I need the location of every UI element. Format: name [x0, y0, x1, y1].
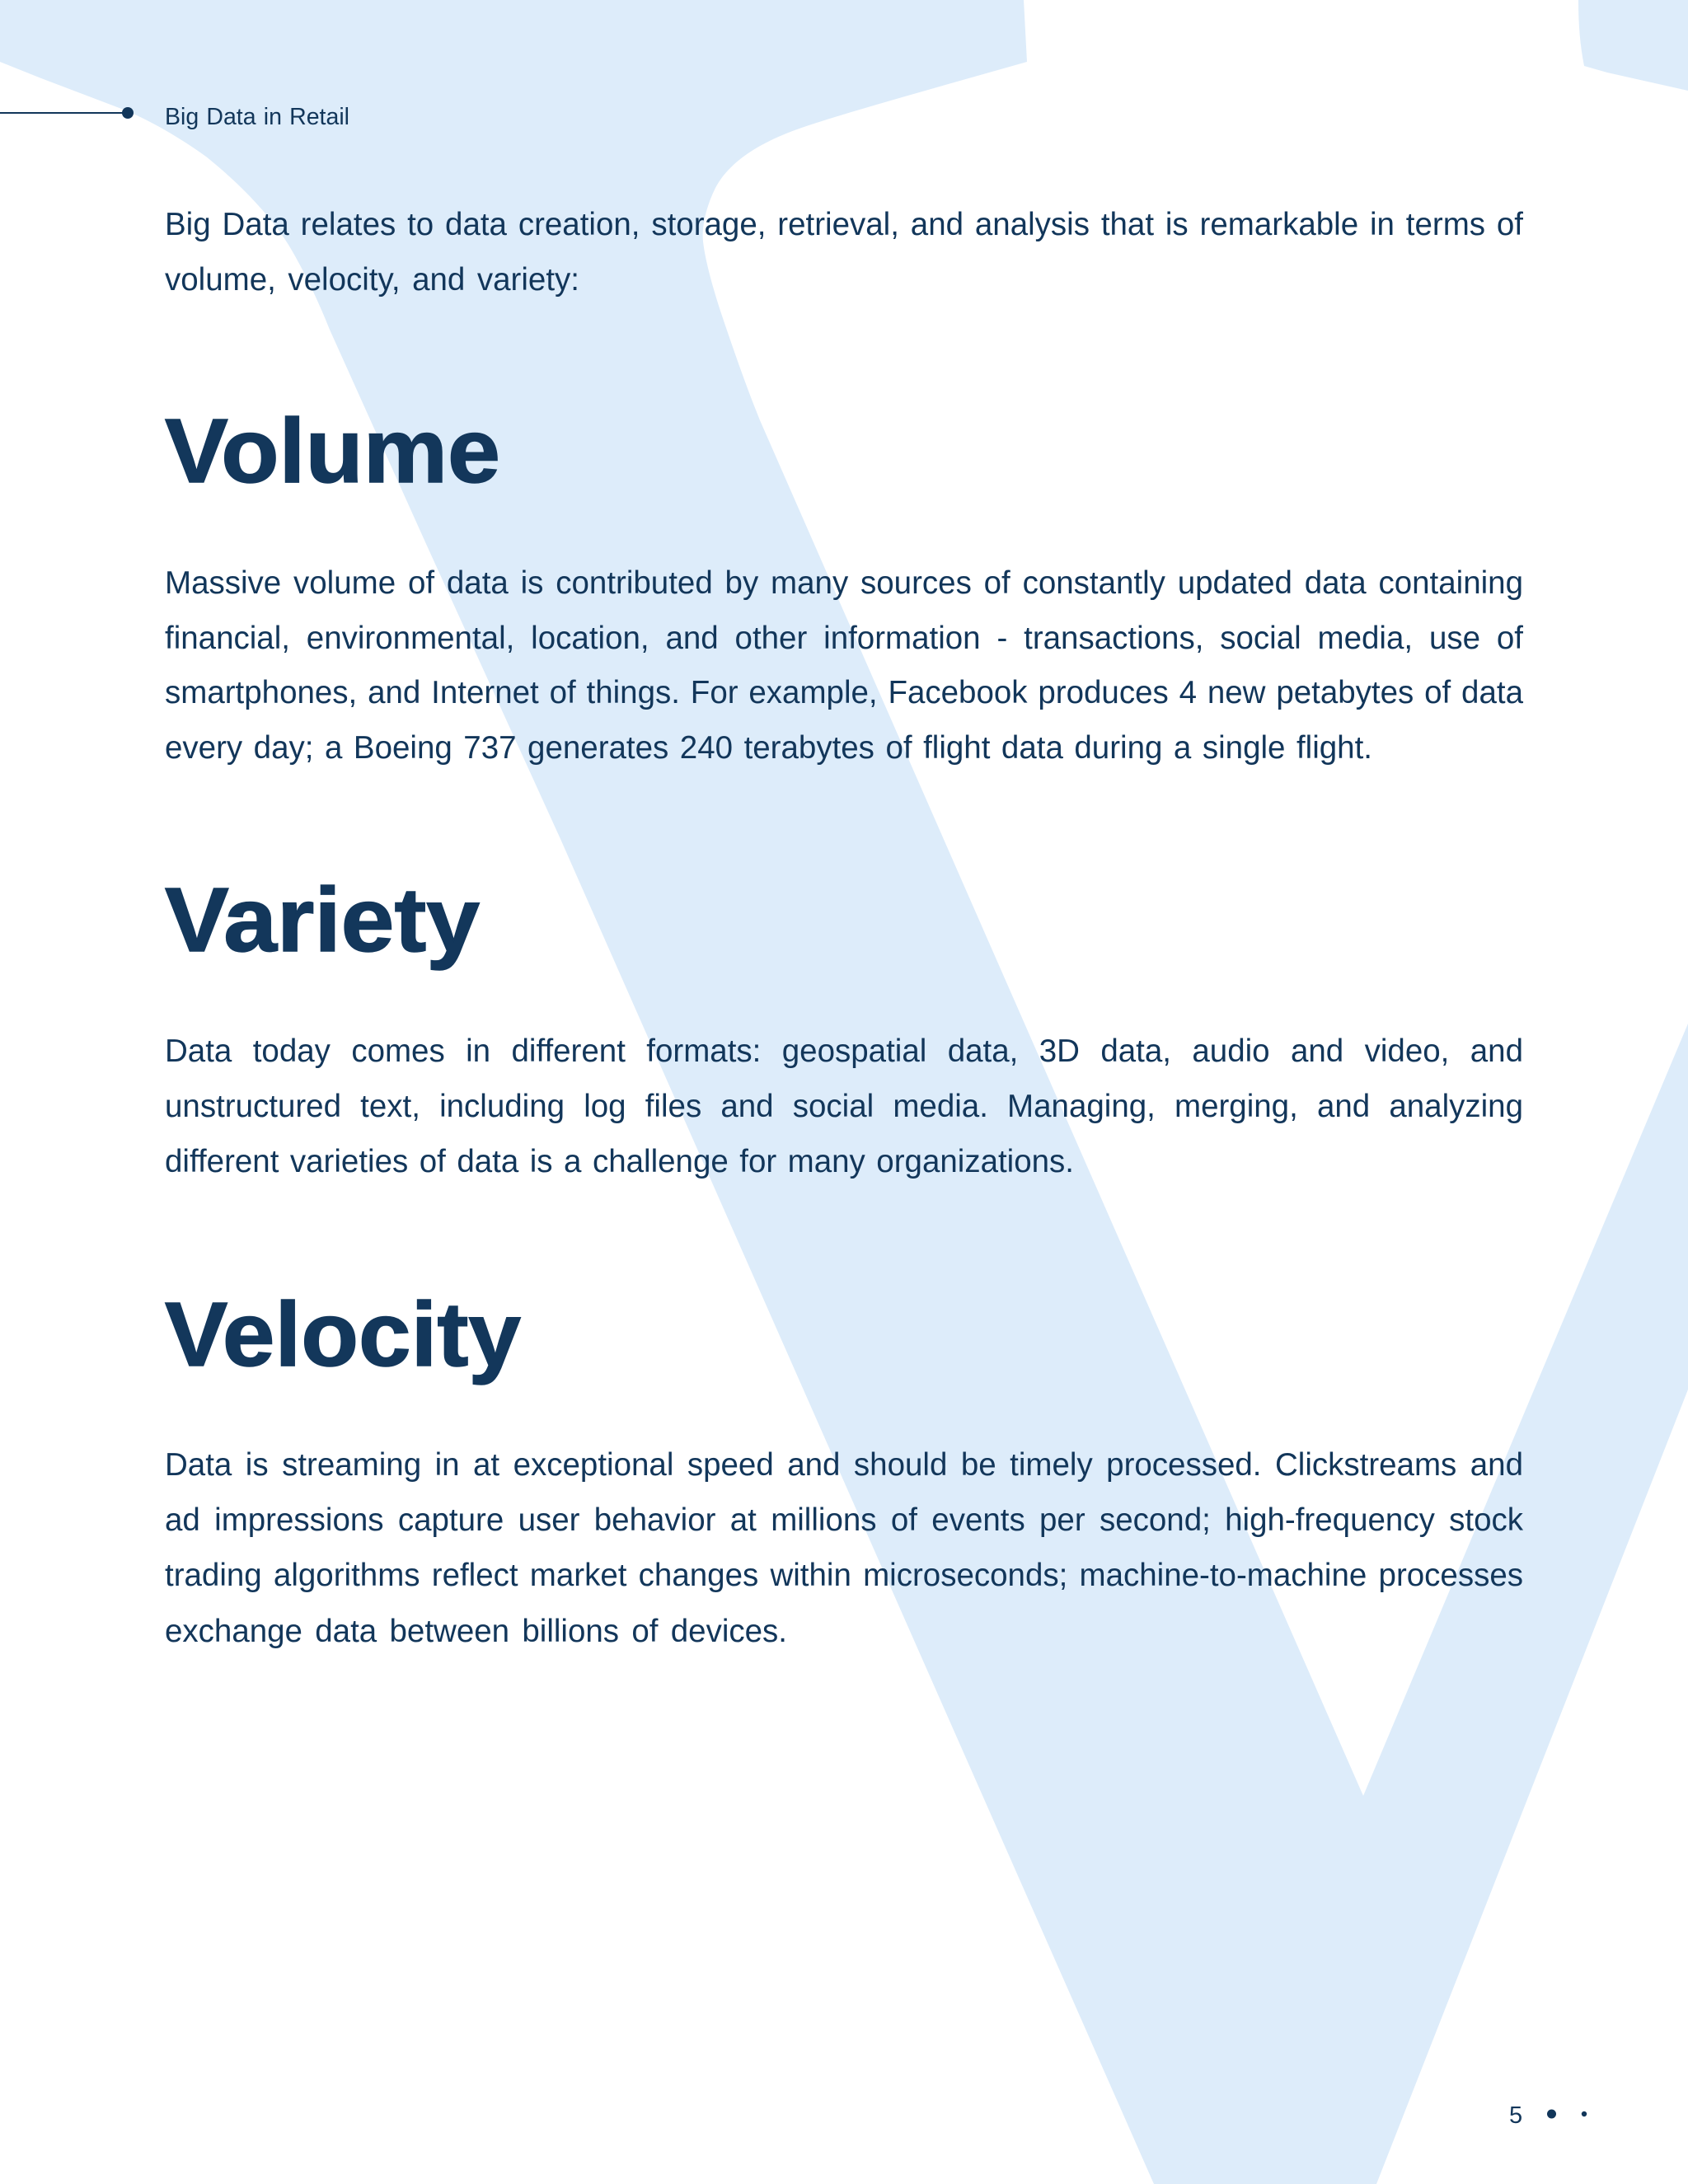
heading: Variety: Variety: [165, 869, 480, 971]
text: smartphones, and Internet of things. For example, Facebook produces 4 new petabytes of data: [165, 675, 1523, 710]
text: exchange data between billions of devices.: [165, 1614, 787, 1648]
header line with dot: [0, 107, 134, 119]
heading: Velocity: Velocity: [165, 1284, 521, 1385]
text: every day; a Boeing 737 generates 240 terabytes of flight data during a single flight.: [165, 730, 1372, 766]
text: ad impressions capture user behavior at millions of events per second; high-frequency stock: [165, 1502, 1523, 1538]
text: Data today comes in different formats: geospatial data, 3D data, audio and video, and: [165, 1033, 1523, 1069]
heading: Volume: Volume: [165, 401, 500, 502]
text: financial, environmental, location, and other information - transactions, social media, use of: [165, 620, 1523, 656]
text: Data is streaming in at exceptional speed and should be timely processed. Clickstreams and: [165, 1447, 1523, 1483]
volume paragraph: [165, 565, 1523, 766]
text: unstructured text, including log files and social media. Managing, merging, and analyzing: [165, 1089, 1523, 1124]
velocity paragraph: [165, 1447, 1523, 1648]
text: Massive volume of data is contributed by many sources of constantly updated data containing: [165, 565, 1523, 601]
text: different varieties of data is a challenge for many organizations.: [165, 1144, 1074, 1179]
intro paragraph: [165, 206, 1523, 297]
variety paragraph: [165, 1033, 1523, 1179]
text: Big Data relates to data creation, storage, retrieval, and analysis that is remarkable in terms of: [165, 206, 1523, 242]
page number and pagination dots: [1509, 2102, 1587, 2129]
page number and pagination dots: 5: [1509, 2102, 1522, 2129]
text: trading algorithms reflect market changes within microseconds; machine-to-machine processes: [165, 1558, 1523, 1593]
running header text: Big Data in Retail: [165, 104, 349, 130]
text: volume, velocity, and variety:: [165, 262, 579, 297]
